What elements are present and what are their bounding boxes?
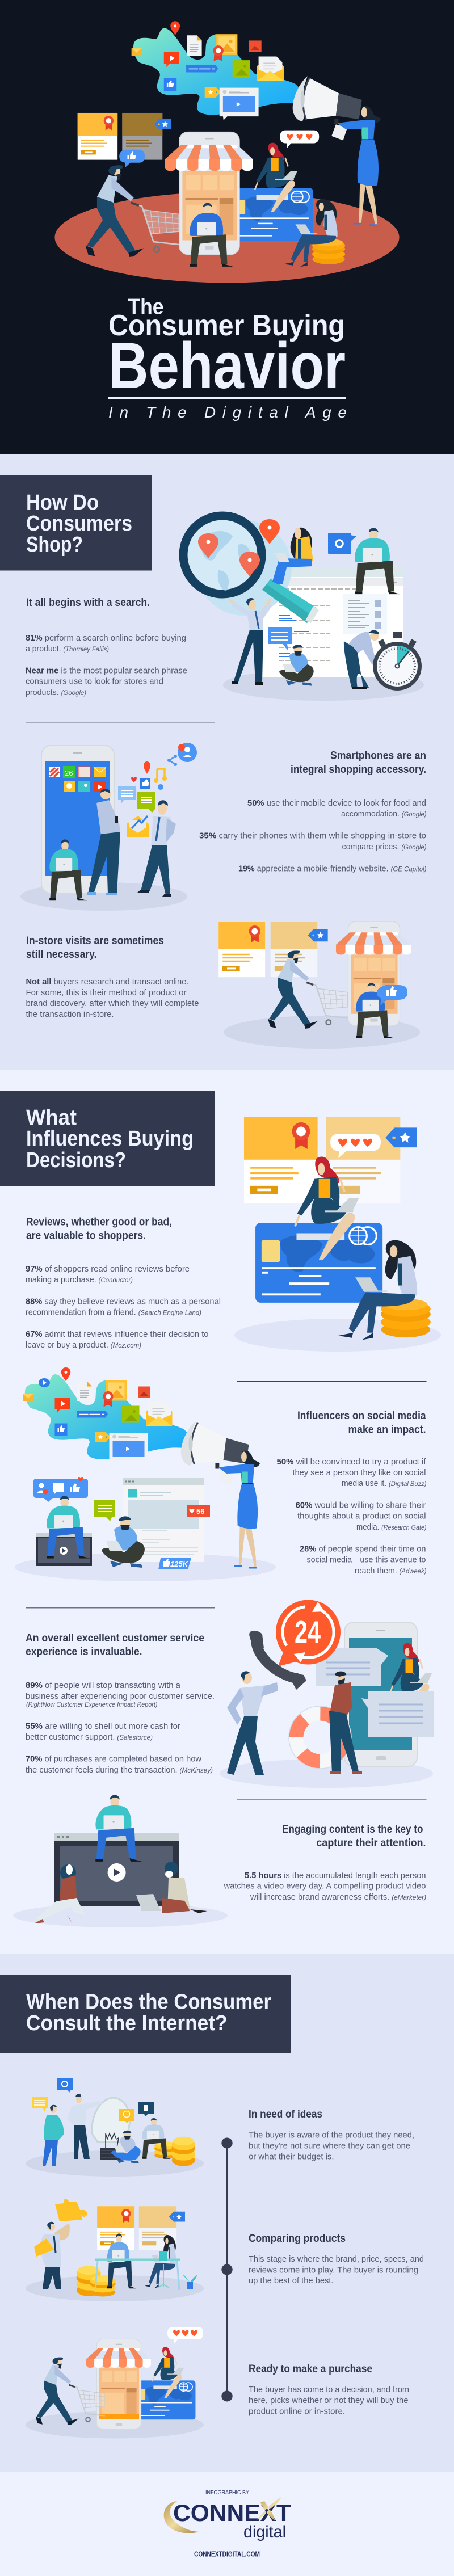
text block: customer service: better customer support. (Salesforce) <box>26 1732 153 1742</box>
illustration: smartphones <box>20 743 197 911</box>
heading panel: how do consumers shop: Consumers <box>26 512 132 536</box>
title: In The Digital Age <box>108 403 347 421</box>
text block: reviews: Reviews, whether good or bad, <box>26 1215 172 1228</box>
illustration: social media influencers: 56 <box>196 1507 204 1516</box>
section background: footer <box>0 2472 454 2576</box>
text block: smartphones: Smartphones are an <box>330 749 426 761</box>
text block: search: Near me is the most popular search phrase <box>26 666 187 675</box>
illustration: search <box>183 516 424 701</box>
text block: in-store <box>26 935 199 1019</box>
text block: comparing products: reviews come into play. The buyer is rounding <box>249 2265 418 2275</box>
text block: influencers: media use it. (Digital Buzz) <box>342 1479 427 1488</box>
footer logo: digital <box>243 2523 286 2541</box>
illustration: customer service: 24 <box>295 1614 321 1649</box>
text block: customer service: experience is invaluable. <box>26 1645 142 1658</box>
text block: smartphones: 50% use their mobile device to look for food and <box>247 798 426 808</box>
text block: smartphones: accommodation. (Google) <box>341 809 427 819</box>
text block: in-store: For some, this is their method of product or <box>26 988 187 997</box>
section background: what influences <box>0 1070 454 1954</box>
text block: reviews: leave or buy a product. (Moz.com) <box>26 1340 141 1350</box>
text block: in need of ideas: but they're not sure where they can get one <box>249 2141 410 2150</box>
text block: engaging content: Engaging content is the key to <box>282 1823 423 1836</box>
text block: engaging content: watches a video every day. A compelling product video <box>224 1882 426 1891</box>
section background: how do consumers shop <box>0 454 454 1070</box>
text block: in need of ideas <box>249 2108 414 2162</box>
text block: in need of ideas: The buyer is aware of the product they need, <box>249 2130 414 2140</box>
text block: influencers: 28% of people spend their time on <box>300 1544 426 1554</box>
text block: engaging content: will increase brand awareness efforts. (eMarketer) <box>250 1892 426 1902</box>
text block: comparing products <box>249 2232 424 2285</box>
text block: search: It all begins with a search. <box>26 596 150 609</box>
footer logo <box>164 2489 291 2558</box>
illustration: reviews <box>234 1117 441 1352</box>
title: Consumer Buying <box>108 309 345 342</box>
text block: influencers: 50% will be convinced to try a product if <box>277 1457 426 1467</box>
heading panel: how do consumers shop: Shop? <box>26 533 83 557</box>
footer logo: INFOGRAPHIC BY <box>205 2489 249 2496</box>
text block: ready to make a purchase <box>249 2363 409 2416</box>
text block: smartphones: 35% carry their phones with them while shopping in-store to <box>199 831 426 841</box>
text block: customer service: 89% of people will stop transacting with a <box>26 1681 181 1690</box>
illustration: smartphones: 26 <box>65 769 73 777</box>
text block: engaging content <box>224 1823 426 1902</box>
illustration: ready to make a purchase <box>26 2327 204 2439</box>
section background: hero <box>0 0 454 454</box>
text block: reviews: making a purchase. (Conductor) <box>26 1275 133 1285</box>
heading panel: when does the consumer consult the internet: Consult the Internet? <box>26 2011 227 2035</box>
text block: in-store: still necessary. <box>26 948 96 961</box>
text block: smartphones: 19% appreciate a mobile-friendly website. (GE Capitol) <box>238 864 427 874</box>
text block: reviews: 67% admit that reviews influence their decision to <box>26 1329 208 1339</box>
heading panel: what influences buying decisions: Influences Buying <box>26 1127 194 1151</box>
text block: ready to make a purchase: here, picks whether or not they will buy the <box>249 2396 409 2405</box>
title <box>108 295 347 421</box>
text block: influencers: media. (Research Gate) <box>356 1522 427 1532</box>
text block: influencers: Influencers on social media <box>297 1409 426 1422</box>
text block: in need of ideas: In need of ideas <box>249 2108 322 2120</box>
text block: influencers: 60% would be willing to share their <box>295 1500 426 1510</box>
text block: search: products. (Google) <box>26 688 86 697</box>
text block: in-store: Not all buyers research and transact online. <box>26 977 188 987</box>
text block: search: 81% perform a search online before buying <box>26 633 186 643</box>
text block: ready to make a purchase: The buyer has come to a decision, and from <box>249 2385 409 2394</box>
heading panel: what influences buying decisions: What <box>26 1106 77 1130</box>
illustration: social media influencers: 125K <box>170 1560 189 1568</box>
text block: customer service: 55% are willing to shell out more cash for <box>26 1721 180 1731</box>
text block: engaging content: capture their attention. <box>317 1837 426 1849</box>
text block: customer service: 70% of purchases are completed based on how <box>26 1754 201 1763</box>
text block: in need of ideas: or what their budget is. <box>249 2152 334 2162</box>
heading panel: how do consumers shop: How Do <box>26 491 99 515</box>
text block: smartphones: integral shopping accessory. <box>291 763 426 776</box>
text block: customer service: business after experiencing poor customer service. <box>26 1691 215 1701</box>
hero illustration <box>54 21 400 283</box>
footer logo: CONNEXTDIGITAL.COM <box>194 2550 260 2558</box>
title: The <box>128 295 163 319</box>
text block: reviews: 97% of shoppers read online reviews before <box>26 1264 190 1274</box>
text block: customer service: (RightNow Customer Experience Impact Report) <box>26 1701 158 1708</box>
illustration: in-store <box>218 921 420 1049</box>
illustration: comparing products <box>26 2199 204 2301</box>
text block: influencers: they see a person they like on social <box>293 1468 426 1478</box>
text block: ready to make a purchase: Ready to make a purchase <box>249 2363 372 2375</box>
text block: reviews: 88% say they believe reviews as much as a personal <box>26 1297 221 1306</box>
heading panel: how do consumers shop <box>0 475 152 571</box>
text block: comparing products: up the best of the best. <box>249 2276 334 2285</box>
text block: search <box>26 596 187 697</box>
footer logo: CONNEXT <box>173 2499 291 2526</box>
text block: in-store: brand discovery, after which they will complete <box>26 999 199 1008</box>
section background: when does the consumer consult <box>0 1954 454 2472</box>
text block: customer service: the customer feels during the transaction. (McKinsey) <box>26 1765 213 1775</box>
illustration: video content <box>13 1795 228 1927</box>
illustration: social media influencers <box>15 1367 276 1581</box>
text block: influencers: reach them. (Adweek) <box>355 1566 427 1576</box>
text block: ready to make a purchase: product online or in-store. <box>249 2407 345 2416</box>
text block: influencers: social media—use this avenue to <box>306 1555 426 1565</box>
text block: influencers: thoughts about a product on social <box>297 1512 426 1521</box>
title: Behavior <box>108 330 346 402</box>
text block: reviews <box>26 1215 221 1350</box>
timeline <box>221 2138 233 2401</box>
illustration: in need of ideas <box>26 2078 204 2177</box>
text block: search: consumers use to look for stores and <box>26 676 163 687</box>
text block: influencers: make an impact. <box>348 1423 426 1436</box>
heading panel: when does the consumer consult the internet: When Does the Consumer <box>26 1990 271 2014</box>
heading panel: what influences buying decisions: Decisions? <box>26 1148 126 1172</box>
text block: in-store: the transaction in-store. <box>26 1009 114 1019</box>
text block: search: a product. (Thornley Fallis) <box>26 644 109 654</box>
heading panel: when does the consumer consult the internet <box>0 1975 291 2053</box>
text block: comparing products: This stage is where the brand, price, specs, and <box>249 2254 424 2264</box>
illustration: customer service <box>220 1600 434 1788</box>
text block: reviews: recommendation from a friend. (Search Engine Land) <box>26 1307 201 1318</box>
text block: comparing products: Comparing products <box>249 2232 346 2245</box>
text block: customer service <box>26 1632 215 1775</box>
text block: in-store: In-store visits are sometimes <box>26 935 164 947</box>
text block: influencers <box>277 1409 427 1576</box>
text block: reviews: are valuable to shoppers. <box>26 1229 146 1241</box>
heading panel: what influences buying decisions <box>0 1091 215 1186</box>
text block: smartphones <box>199 749 427 874</box>
text block: engaging content: 5.5 hours is the accumulated length each person <box>245 1871 426 1880</box>
text block: smartphones: compare prices. (Google) <box>342 842 427 852</box>
text block: customer service: An overall excellent customer service <box>26 1632 204 1644</box>
